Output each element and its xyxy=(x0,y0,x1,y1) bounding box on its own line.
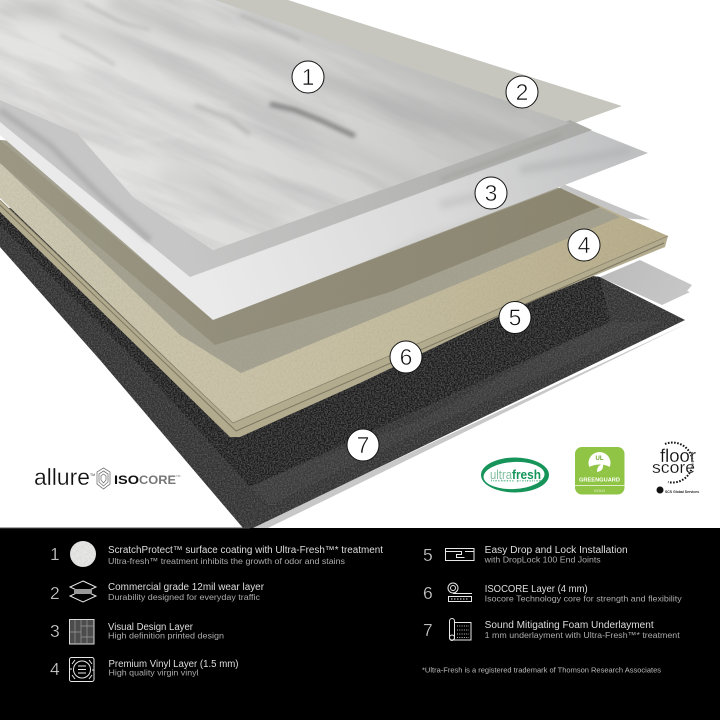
label 1: 1 xyxy=(302,64,314,90)
legend item 3: High definition printed design xyxy=(108,630,224,640)
badge: UL greenguard gold: GREENGUARD xyxy=(579,478,620,484)
legend item 5 xyxy=(423,545,628,565)
label 6 xyxy=(390,341,422,373)
badge: floorscore: floor xyxy=(660,446,696,466)
legend item 3: 3 xyxy=(50,621,60,641)
legend item 1: ScratchProtect™ surface coating with Ultra-Fresh™* treatment xyxy=(108,545,383,556)
brand logo: allure isocore: CORE xyxy=(139,475,176,487)
badge: floorscore: score xyxy=(652,458,695,477)
legend item 4: 4 xyxy=(50,659,60,679)
badge: ultra-fresh: freshness protection xyxy=(491,478,541,482)
legend item 3 xyxy=(50,620,224,644)
label 2: 2 xyxy=(516,79,528,105)
label 6: 6 xyxy=(400,344,412,370)
layer 2: wear layer sheet xyxy=(215,0,622,200)
brand logo: allure isocore: allure xyxy=(34,464,90,490)
layer 2 overlap band xyxy=(0,98,592,277)
layer 7: foam underlayment xyxy=(0,207,690,528)
footnote: *Ultra-Fresh is a registered trademark of Thomson Research Associates xyxy=(422,666,661,674)
legend item 2: Durability designed for everyday traffic xyxy=(108,592,261,602)
legend item 5: with DropLock 100 End Joints xyxy=(484,554,601,564)
label 5: 5 xyxy=(509,304,521,330)
legend item 5: Easy Drop and Lock Installation xyxy=(485,545,628,556)
label 5 xyxy=(499,302,531,334)
label 4: 4 xyxy=(578,232,591,258)
badge: ultra-fresh: ultra xyxy=(490,467,513,482)
brand logo: allure isocore xyxy=(34,464,181,490)
legend item 6: ISOCORE Layer (4 mm) xyxy=(485,584,588,595)
badge: UL greenguard gold: GOLD xyxy=(594,488,605,493)
brand logo: allure isocore: ISO xyxy=(114,475,139,487)
label 7 xyxy=(347,429,379,461)
legend item 7: Sound Mitigating Foam Underlayment xyxy=(485,620,654,631)
legend item 1: 1 xyxy=(50,544,60,564)
legend item 6 xyxy=(423,583,682,604)
legend item 2: Commercial grade 12mil wear layer xyxy=(108,582,265,593)
brand logo: allure isocore: TM xyxy=(176,474,181,478)
badge: floorscore xyxy=(652,443,699,494)
legend item 6: Isocore Technology core for strength and flexibility xyxy=(485,594,682,604)
label 7: 7 xyxy=(357,432,369,458)
legend item 2: 2 xyxy=(50,583,60,603)
legend item 1 xyxy=(50,541,383,567)
badge: UL greenguard gold xyxy=(575,447,624,494)
bottom legend panel xyxy=(0,528,720,720)
label 1 xyxy=(292,61,324,93)
legend item 6: 6 xyxy=(423,583,433,603)
legend item 3: Visual Design Layer xyxy=(108,622,194,633)
legend item 2 xyxy=(50,581,265,603)
badge: floorscore: SCS Global Services xyxy=(665,490,699,494)
legend item 1: Ultra-fresh™ treatment inhibits the growth of odor and stains xyxy=(108,556,345,566)
layer 4-6: tan ISOCORE plank xyxy=(0,140,668,437)
legend item 7 xyxy=(423,618,680,640)
legend item 5: 5 xyxy=(423,545,433,565)
label 4 xyxy=(568,229,600,261)
legend item 7: 7 xyxy=(423,620,433,640)
label 3 xyxy=(475,177,507,209)
legend item 4 xyxy=(50,658,238,682)
legend item 4: Premium Vinyl Layer (1.5 mm) xyxy=(108,659,238,670)
legend item 7: 1 mm underlayment with Ultra-Fresh™* treatment xyxy=(485,630,680,640)
badge: ultra-fresh: fresh xyxy=(512,467,541,482)
brand logo: allure isocore: TM xyxy=(90,473,95,477)
legend item 4: High quality virgin vinyl xyxy=(108,668,199,678)
badge: ultra-fresh xyxy=(481,458,549,492)
badge: UL greenguard gold: UL xyxy=(596,456,604,462)
gray shadow sheets behind layers xyxy=(558,184,692,305)
label 3: 3 xyxy=(485,180,497,206)
layer 1: marble surface xyxy=(0,0,570,250)
label 2 xyxy=(506,76,538,108)
layer 3: visual design layer xyxy=(0,122,648,320)
